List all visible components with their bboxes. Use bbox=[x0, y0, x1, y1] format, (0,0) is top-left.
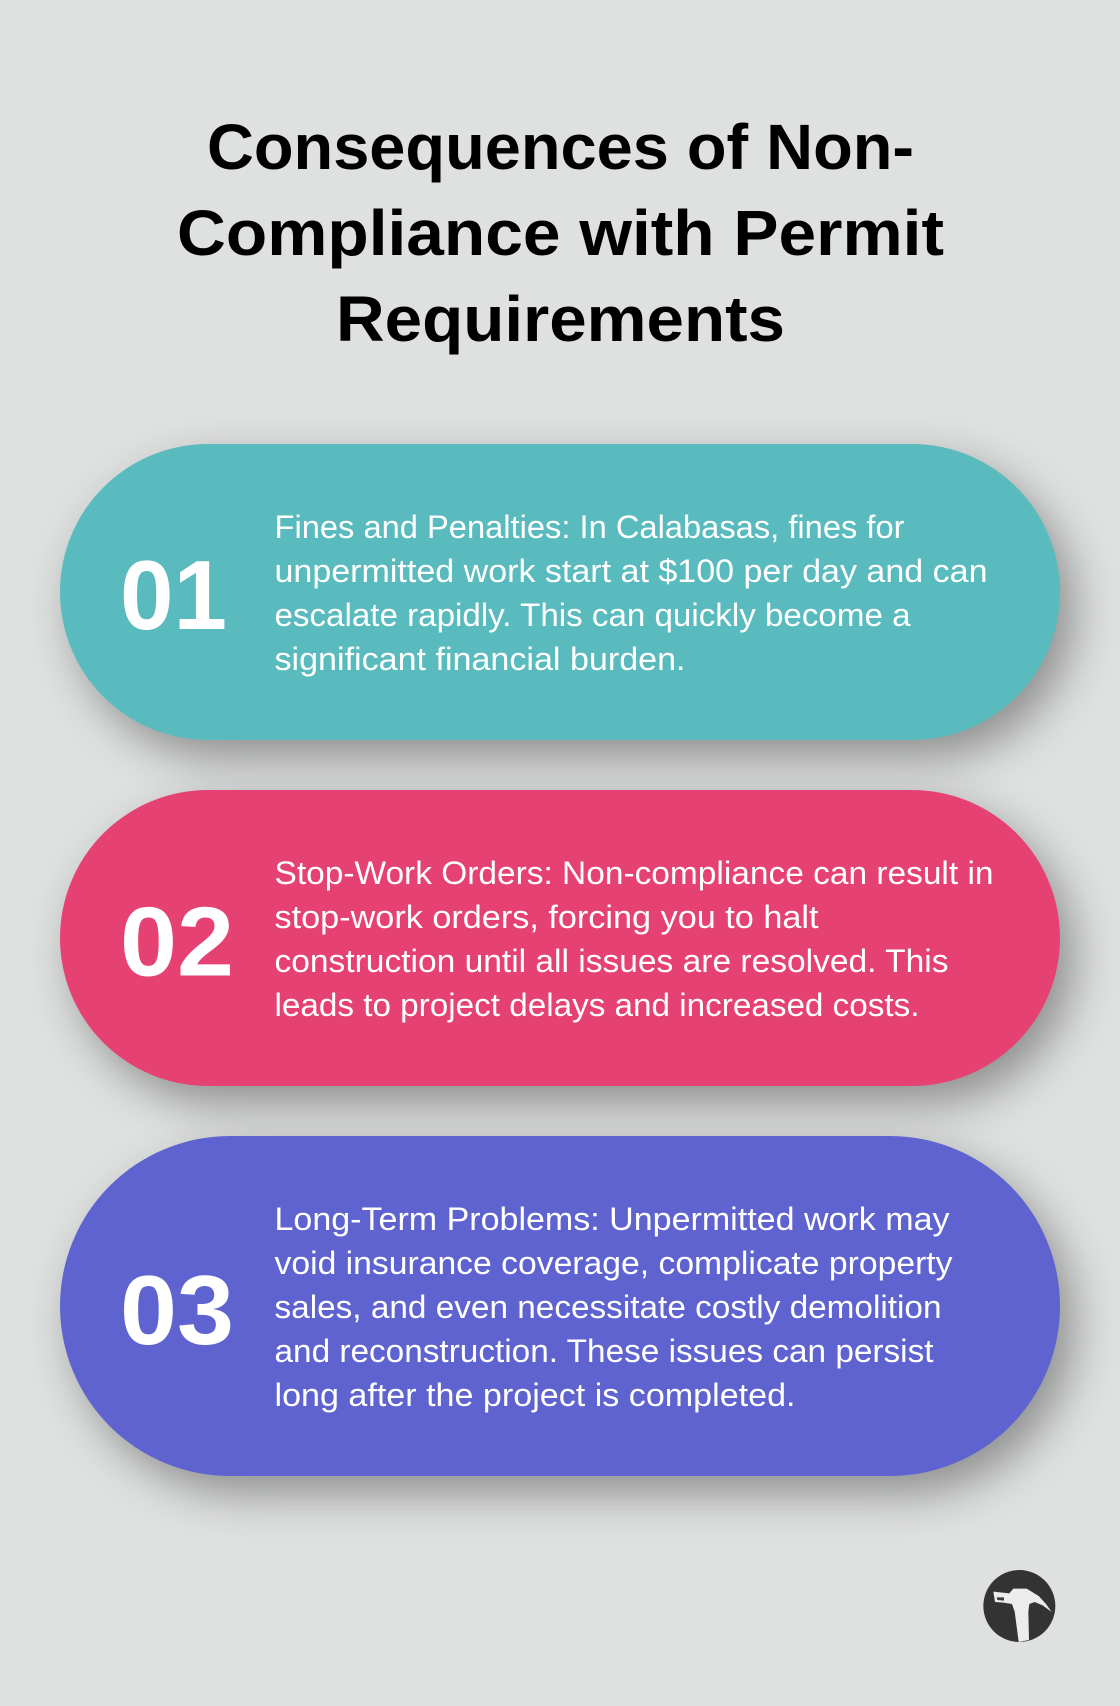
number 03: 03 bbox=[120, 1255, 234, 1365]
title: Requirements bbox=[336, 283, 785, 355]
text block: stop-work orders: leads to project delays and increased costs. bbox=[274, 987, 920, 1023]
text block: stop-work orders: stop-work orders, forcing you to halt bbox=[274, 899, 819, 935]
number 02: 02 bbox=[120, 886, 234, 996]
text block: stop-work orders: construction until all issues are resolved. This bbox=[274, 943, 949, 979]
text block: fines and penalties: unpermitted work start at $100 per day and can bbox=[274, 553, 988, 589]
panel: stop-work orders bbox=[60, 790, 1060, 1086]
icon: hammer logo bbox=[983, 1570, 1055, 1642]
panel: fines and penalties bbox=[60, 444, 1060, 740]
panel: long-term problems bbox=[60, 1136, 1060, 1476]
text block: long-term problems: sales, and even necessitate costly demolition bbox=[274, 1289, 942, 1325]
text block: long-term problems bbox=[274, 1201, 952, 1413]
text block: fines and penalties bbox=[274, 509, 988, 677]
text block: fines and penalties: escalate rapidly. This can quickly become a bbox=[274, 597, 911, 633]
title: Compliance with Permit bbox=[177, 197, 944, 269]
text block: stop-work orders: Stop-Work Orders: Non-compliance can result in bbox=[274, 855, 994, 891]
text block: long-term problems: and reconstruction. These issues can persist bbox=[274, 1333, 934, 1369]
title: Consequences of Non- bbox=[207, 111, 914, 183]
text block: long-term problems: long after the project is completed. bbox=[274, 1377, 796, 1413]
number 01: 01 bbox=[120, 540, 227, 650]
title bbox=[177, 111, 944, 355]
text block: long-term problems: void insurance coverage, complicate property bbox=[274, 1245, 952, 1281]
text block: fines and penalties: significant financial burden. bbox=[274, 641, 686, 677]
text block: long-term problems: Long-Term Problems: Unpermitted work may bbox=[274, 1201, 950, 1237]
text block: stop-work orders bbox=[274, 855, 994, 1023]
text block: fines and penalties: Fines and Penalties: In Calabasas, fines for bbox=[274, 509, 905, 545]
